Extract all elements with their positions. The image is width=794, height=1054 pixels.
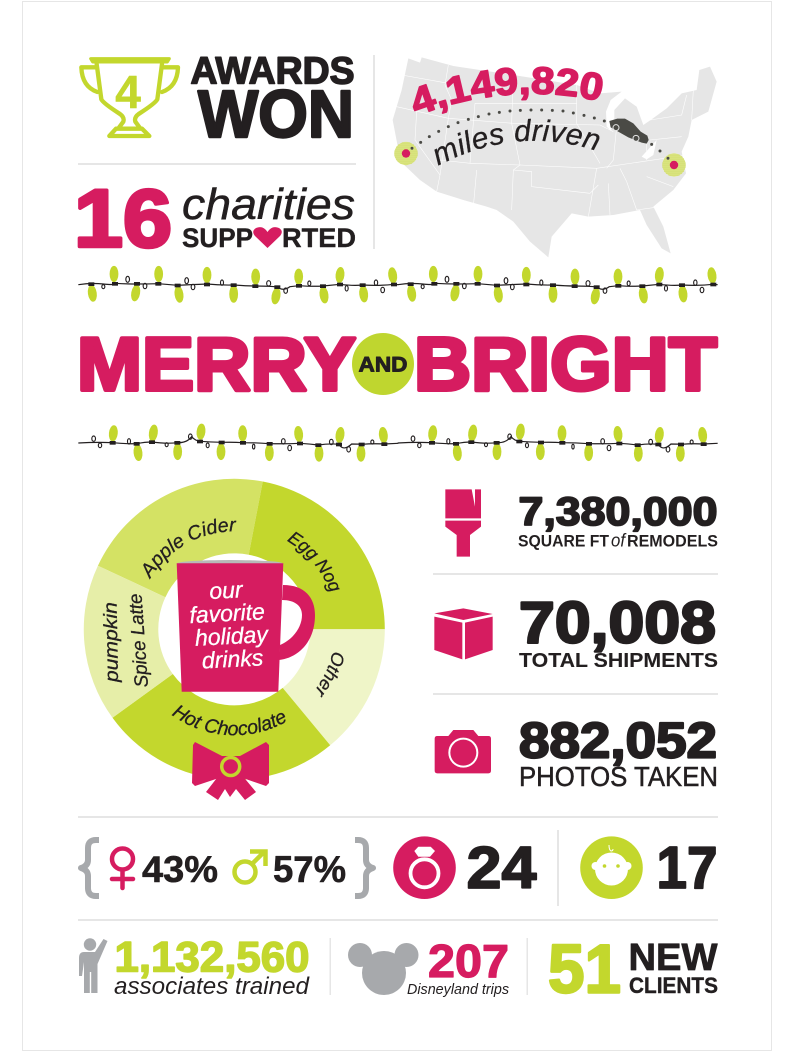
- title word: merry: MERRY: [77, 322, 356, 406]
- number: 70,008: [519, 590, 716, 656]
- mug text: [188, 575, 271, 674]
- mug text: drinks: [201, 644, 264, 673]
- icon: female symbol: [112, 848, 133, 888]
- number: 1,132,560: [114, 934, 310, 982]
- segment: apple cider: [98, 479, 263, 597]
- label: clients: CLIENTS: [629, 973, 718, 998]
- title word: bright: BRIGHT: [414, 322, 717, 406]
- segment: pumpkin spice latte: [84, 566, 173, 718]
- icon: mug: [177, 560, 315, 692]
- label: pumpkin: pumpkin: [101, 602, 123, 683]
- icon: person: [79, 938, 108, 993]
- caption: TOTAL SHIPMENTS: [519, 649, 718, 672]
- icon: camera: [435, 730, 491, 773]
- map: miles driven: [392, 58, 716, 258]
- badge: and: AND: [358, 354, 408, 376]
- dotted route: [411, 108, 669, 160]
- label: new: NEW: [628, 937, 718, 979]
- caption: SQUARE FT: [518, 532, 610, 550]
- label: hot chocolate: Hot Chocolate: [172, 705, 286, 736]
- mug text: favorite: [189, 598, 265, 628]
- icon: paint brush: [445, 489, 481, 557]
- text: supp: SUPP: [182, 223, 253, 253]
- male percent: 57%: [273, 849, 346, 890]
- female percent: 43%: [142, 849, 218, 890]
- icon: car: [609, 119, 649, 144]
- caption: Disneyland trips: [407, 981, 509, 998]
- caption: REMODELS: [627, 532, 718, 550]
- icon: mouse ears: [348, 943, 418, 995]
- donut chart: favorite holiday drinks: [84, 478, 385, 800]
- icon: heart: [253, 227, 282, 248]
- trophy number: 4: [115, 66, 141, 118]
- number: 882,052: [519, 712, 717, 768]
- segment: other: [283, 629, 385, 745]
- icon: male symbol: [234, 851, 266, 882]
- us map: [393, 57, 717, 257]
- number: 24: [466, 835, 537, 901]
- label: egg nog: Egg Nog: [287, 532, 340, 592]
- number: miles: 4,149,820: [412, 66, 603, 114]
- icon: bow: [192, 742, 269, 800]
- stat: babies: [580, 835, 718, 901]
- caption: PHOTOS TAKEN: [519, 761, 718, 792]
- number: 51: [548, 930, 621, 1008]
- stat: total shipments: [434, 590, 718, 672]
- stat: disneyland trips: [348, 935, 509, 998]
- icon: trophy: [81, 59, 178, 136]
- icon: baby: [580, 836, 643, 899]
- label: apple cider: Apple Cider: [143, 518, 236, 580]
- caption: associates trained: [114, 973, 310, 1000]
- text: rted: RTED: [282, 223, 356, 253]
- badge: and: [352, 333, 414, 395]
- mug text: our: [209, 576, 245, 604]
- number: 17: [656, 835, 718, 901]
- start pin: [394, 142, 418, 165]
- segment: hot chocolate: [112, 674, 330, 780]
- end pin: [662, 153, 686, 177]
- awards won block: [81, 50, 354, 152]
- label: other: Other: [316, 652, 344, 698]
- icon: box: [434, 608, 493, 659]
- right brace: [355, 840, 373, 896]
- number 16: 16: [74, 174, 172, 264]
- caption: [518, 530, 718, 550]
- stat: associates trained: [79, 934, 310, 1000]
- title: merry and bright: [77, 322, 717, 406]
- string lights: bottom: [78, 424, 718, 461]
- label: spice latte: Spice Latte: [125, 593, 153, 688]
- caption: of: [611, 530, 627, 550]
- mug text: holiday: [194, 621, 270, 651]
- number: 207: [428, 935, 509, 987]
- icon: ring: [393, 836, 456, 899]
- heading: won: WON: [198, 77, 354, 152]
- stat: engagements: [393, 835, 537, 901]
- stat: photos taken: [435, 712, 718, 792]
- segment: egg nog: [249, 482, 385, 629]
- stat: square feet of remodels: [445, 489, 718, 557]
- charities supported block: [74, 174, 356, 264]
- heading: awards: AWARDS: [190, 50, 354, 92]
- text: charities: charities: [182, 180, 355, 229]
- number: 7,380,000: [518, 490, 718, 534]
- text: miles driven: miles driven: [434, 118, 600, 166]
- stat: new clients: [548, 930, 718, 1008]
- left brace: [81, 840, 99, 896]
- gender split: [81, 840, 373, 896]
- string lights: top: [78, 266, 718, 305]
